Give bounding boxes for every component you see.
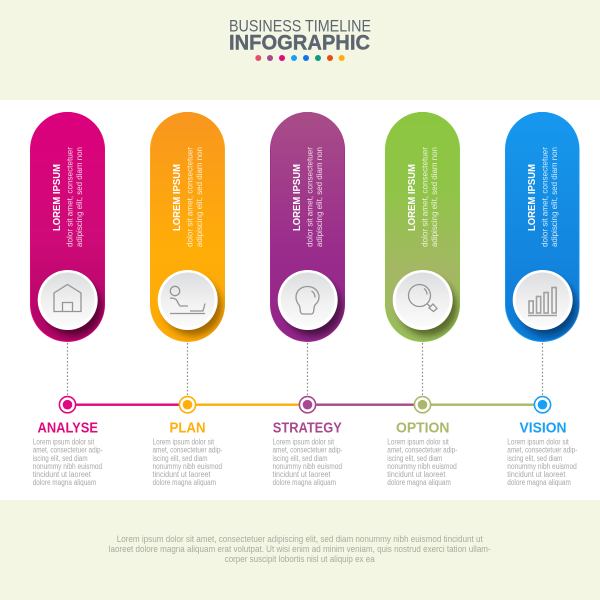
title: BUSINESS TIMELINE [229,16,371,36]
text block: strategy: dolore magna aliquam [272,478,336,487]
panel: plan pill: dolor sit amet, consectetuer [186,147,194,247]
text block: strategy: Lorem ipsum dolor sit [272,438,335,446]
icon: light bulb [296,286,319,314]
footer text: corper suscipit lobortis nisl ut aliquip ex ea [225,554,375,564]
icon: house [54,284,81,312]
panel: vision pill: adipiscing elit, sed diam non [550,147,559,247]
text block: plan: Lorem ipsum dolor sit [152,438,215,446]
heading: option: OPTION [396,420,450,437]
pill text: LOREM IPSUM [52,164,63,231]
panel: vision pill: dolor sit amet, consectetuer [540,147,550,247]
panel: strategy pill: dolor sit amet, consectetuer [306,147,314,247]
text block: analyse: iscing elit, sed diam [33,454,88,463]
timeline node: analyse [59,397,76,413]
text block: analyse: Lorem ipsum dolor sit [33,438,95,446]
connectors: dotted lines [68,343,542,395]
panel: option pill [385,112,460,342]
text block: strategy: nonummy nibh euismod [272,462,342,471]
panel: analyse pill: adipiscing elit, sed diam non [75,147,84,247]
text block: analyse: dolore magna aliquam [33,478,96,487]
timeline line [68,404,542,406]
footer text [109,534,491,564]
icon: bar chart [528,288,557,316]
panel: vision pill [505,112,580,342]
text block: option: dolore magna aliquam [387,478,451,487]
pill text: LOREM IPSUM [172,164,183,231]
text block: strategy [272,438,343,487]
panel: analyse pill: dolor sit amet, consectetuer [66,147,74,247]
heading: plan: PLAN [170,420,206,437]
panel: plan pill [150,112,225,342]
text block: option: amet, consectetuer adip- [387,446,458,455]
pill text: LOREM IPSUM [292,164,303,231]
panel: option pill: dolor sit amet, consectetuer [420,147,430,247]
panel: option pill: adipiscing elit, sed diam non [430,147,439,247]
panel: strategy pill: adipiscing elit, sed diam non [315,147,324,247]
icon: magnifier [408,284,437,312]
text block: option: tincidunt ut laoreet [387,470,446,479]
footer text: Lorem ipsum dolor sit amet, consectetuer adipiscing elit, sed diam nonummy nibh euismod tincidunt ut [117,534,483,544]
timeline node: plan [179,397,196,413]
text block: analyse [33,438,103,487]
text block: option: nonummy nibh euismod [387,462,457,471]
text block: plan: nonummy nibh euismod [152,462,222,471]
text block: analyse: tincidunt ut laoreet [33,470,91,479]
timeline node: vision [534,397,551,413]
text block: vision: dolore magna aliquam [507,478,571,487]
text block: plan [152,438,223,487]
pill text: LOREM IPSUM [527,164,538,231]
footer text: laoreet dolore magna aliquam erat volutpat. Ut wisi enim ad minim veniam, quis nostrud exerci tation ullam- [109,544,491,554]
text block: analyse: amet, consectetuer adip- [33,446,103,455]
panel: plan pill: adipiscing elit, sed diam non [195,147,204,247]
text block: vision: nonummy nibh euismod [507,462,577,471]
heading: analyse: ANALYSE [38,420,98,437]
text block: analyse: nonummy nibh euismod [33,462,102,471]
text block: vision [507,438,578,487]
text block: plan: amet, consectetuer adip- [152,446,223,455]
text block: plan: iscing elit, sed diam [152,454,208,463]
text block: strategy: iscing elit, sed diam [272,454,328,463]
text block: plan: tincidunt ut laoreet [152,470,211,479]
title [229,16,371,55]
text block: plan: dolore magna aliquam [152,478,216,487]
text block: option: iscing elit, sed diam [387,454,442,463]
title colour dots [255,55,345,61]
text block: option [387,438,458,487]
text block: strategy: amet, consectetuer adip- [272,446,343,455]
timeline node: strategy [299,397,316,413]
heading: strategy: STRATEGY [273,420,342,437]
text block: strategy: tincidunt ut laoreet [272,470,331,479]
panel: analyse pill [30,112,105,342]
icon: person at laptop [170,286,205,314]
panel: strategy pill [270,112,345,342]
title: INFOGRAPHIC [229,31,370,55]
heading: vision: VISION [520,420,566,437]
text block: vision: amet, consectetuer adip- [507,446,578,455]
text block: option: Lorem ipsum dolor sit [387,438,449,446]
text block: vision: iscing elit, sed diam [507,454,562,463]
text block: vision: Lorem ipsum dolor sit [507,438,569,446]
text block: vision: tincidunt ut laoreet [507,470,566,479]
pill text: LOREM IPSUM [407,164,418,231]
timeline node: option [414,397,431,413]
